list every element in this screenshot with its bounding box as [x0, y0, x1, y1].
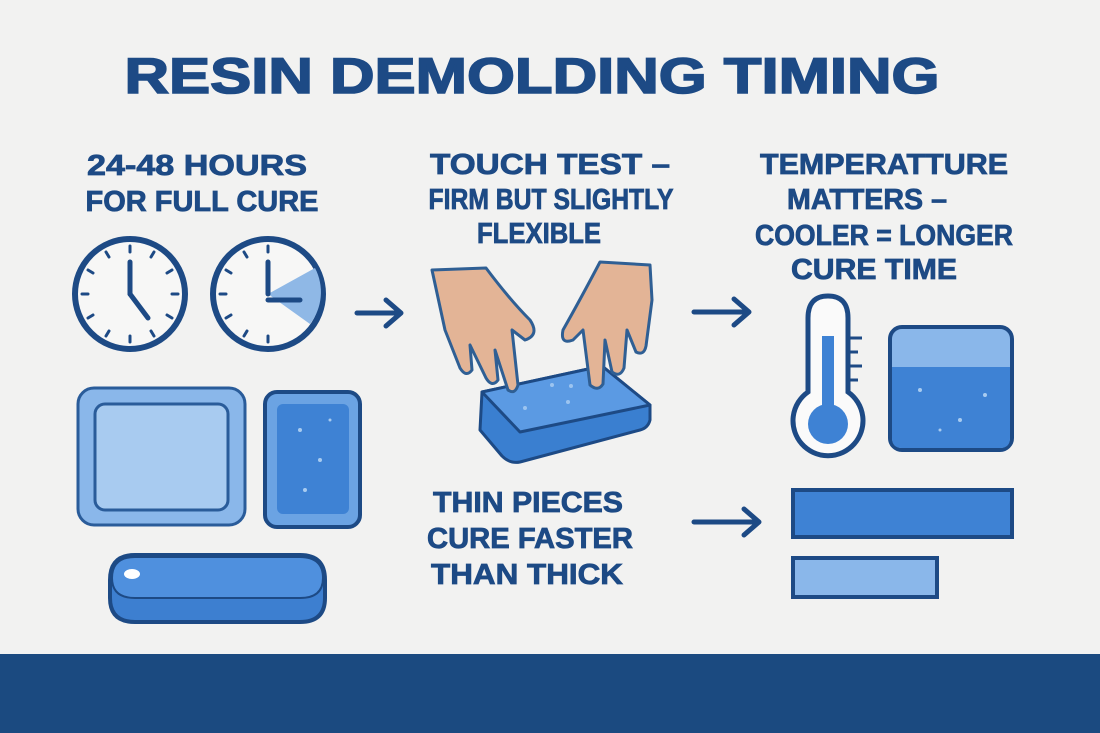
heading: touch test: [428, 149, 674, 250]
heading: full cure: [86, 150, 318, 218]
title: RESIN DEMOLDING TIMING: [124, 48, 940, 104]
icon: clock 1: [75, 239, 185, 349]
heading: full cure: FOR FULL CURE: [86, 186, 318, 218]
icon: thermometer: [793, 296, 863, 456]
heading: thin pieces: CURE FASTER: [427, 523, 633, 555]
icon: glass of resin: [890, 327, 1012, 450]
heading: thin pieces: THAN THICK: [431, 559, 623, 591]
heading: temperature: CURE TIME: [791, 254, 957, 286]
heading: full cure: 24-48 HOURS: [87, 150, 307, 182]
heading: thin pieces: THIN PIECES: [433, 487, 623, 519]
heading: touch test: FLEXIBLE: [477, 218, 601, 250]
arrow 1: [357, 300, 401, 326]
icon: thick bar: [793, 490, 1012, 537]
footer band: [0, 654, 1100, 733]
heading: touch test: TOUCH TEST –: [430, 149, 670, 181]
icon: hands on resin block: [432, 262, 652, 462]
heading: touch test: FIRM BUT SLIGHTLY: [428, 184, 674, 216]
heading: temperature: TEMPERATTURE: [760, 149, 1008, 181]
icon: long bar: [110, 555, 325, 622]
arrow 3: [694, 509, 759, 535]
arrow 2: [694, 299, 749, 325]
icon: square mold: [78, 388, 245, 525]
icon: small mold: [265, 392, 360, 527]
heading: temperature: MATTERS –: [787, 184, 947, 216]
heading: temperature: [755, 149, 1013, 286]
heading: temperature: COOLER = LONGER: [755, 220, 1013, 252]
heading: thin pieces: [427, 487, 633, 591]
icon: thin bar: [793, 558, 937, 597]
icon: clock 2: [213, 239, 323, 349]
